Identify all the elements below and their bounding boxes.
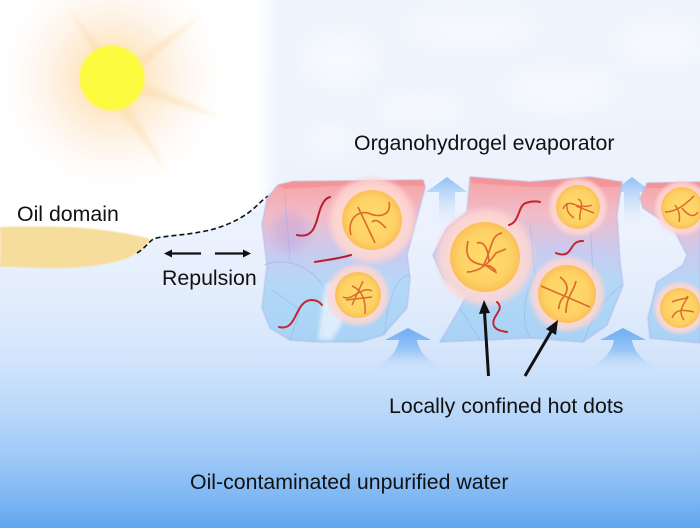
polymer chains xyxy=(493,201,583,332)
gel facets xyxy=(460,220,622,342)
hot dot lower xyxy=(652,280,700,336)
gel purple tint xyxy=(272,212,308,252)
repulsion arrows xyxy=(164,250,251,258)
label: oil domain: Oil domain xyxy=(17,202,119,226)
gel body xyxy=(640,182,700,343)
hot dot large xyxy=(433,205,537,309)
upper vapor arrow right xyxy=(612,177,652,228)
hot dot lower xyxy=(325,262,391,328)
hot dot upper xyxy=(326,174,418,266)
hot dot upper right xyxy=(547,176,609,238)
oil domain xyxy=(0,226,150,268)
gel top edge xyxy=(278,180,425,189)
gel facets xyxy=(264,195,410,342)
sun rays xyxy=(68,8,222,172)
hot dot lower right xyxy=(527,254,607,334)
lower vapor arrow right xyxy=(578,328,668,373)
gel block 1 xyxy=(262,174,425,342)
sun disc xyxy=(80,46,144,110)
gel block 2 xyxy=(433,176,623,342)
arrow to hot dot lower xyxy=(525,320,558,376)
sun xyxy=(0,0,224,190)
label: evaporator: Organohydrogel evaporator xyxy=(354,131,614,155)
air region above the water line xyxy=(0,0,268,262)
label: repulsion: Repulsion xyxy=(162,266,257,290)
gel block 3 xyxy=(640,179,700,343)
hot dot upper xyxy=(653,179,700,237)
polymer chains xyxy=(279,197,351,328)
label: water: Oil-contaminated unpurified water xyxy=(190,470,508,494)
gel body xyxy=(433,177,623,342)
gel body xyxy=(262,180,425,342)
arrow to hot dot large xyxy=(479,300,490,376)
lower vapor arrow left xyxy=(364,328,452,372)
gel top edge xyxy=(470,177,622,187)
gel top edge xyxy=(646,182,700,188)
white gel facet xyxy=(318,280,344,340)
upper vapor arrow left xyxy=(426,177,467,228)
vapor clouds xyxy=(300,14,700,154)
label: hot dots: Locally confined hot dots xyxy=(389,394,623,418)
dashed oil boundary xyxy=(137,196,268,253)
sun glow xyxy=(0,0,224,190)
